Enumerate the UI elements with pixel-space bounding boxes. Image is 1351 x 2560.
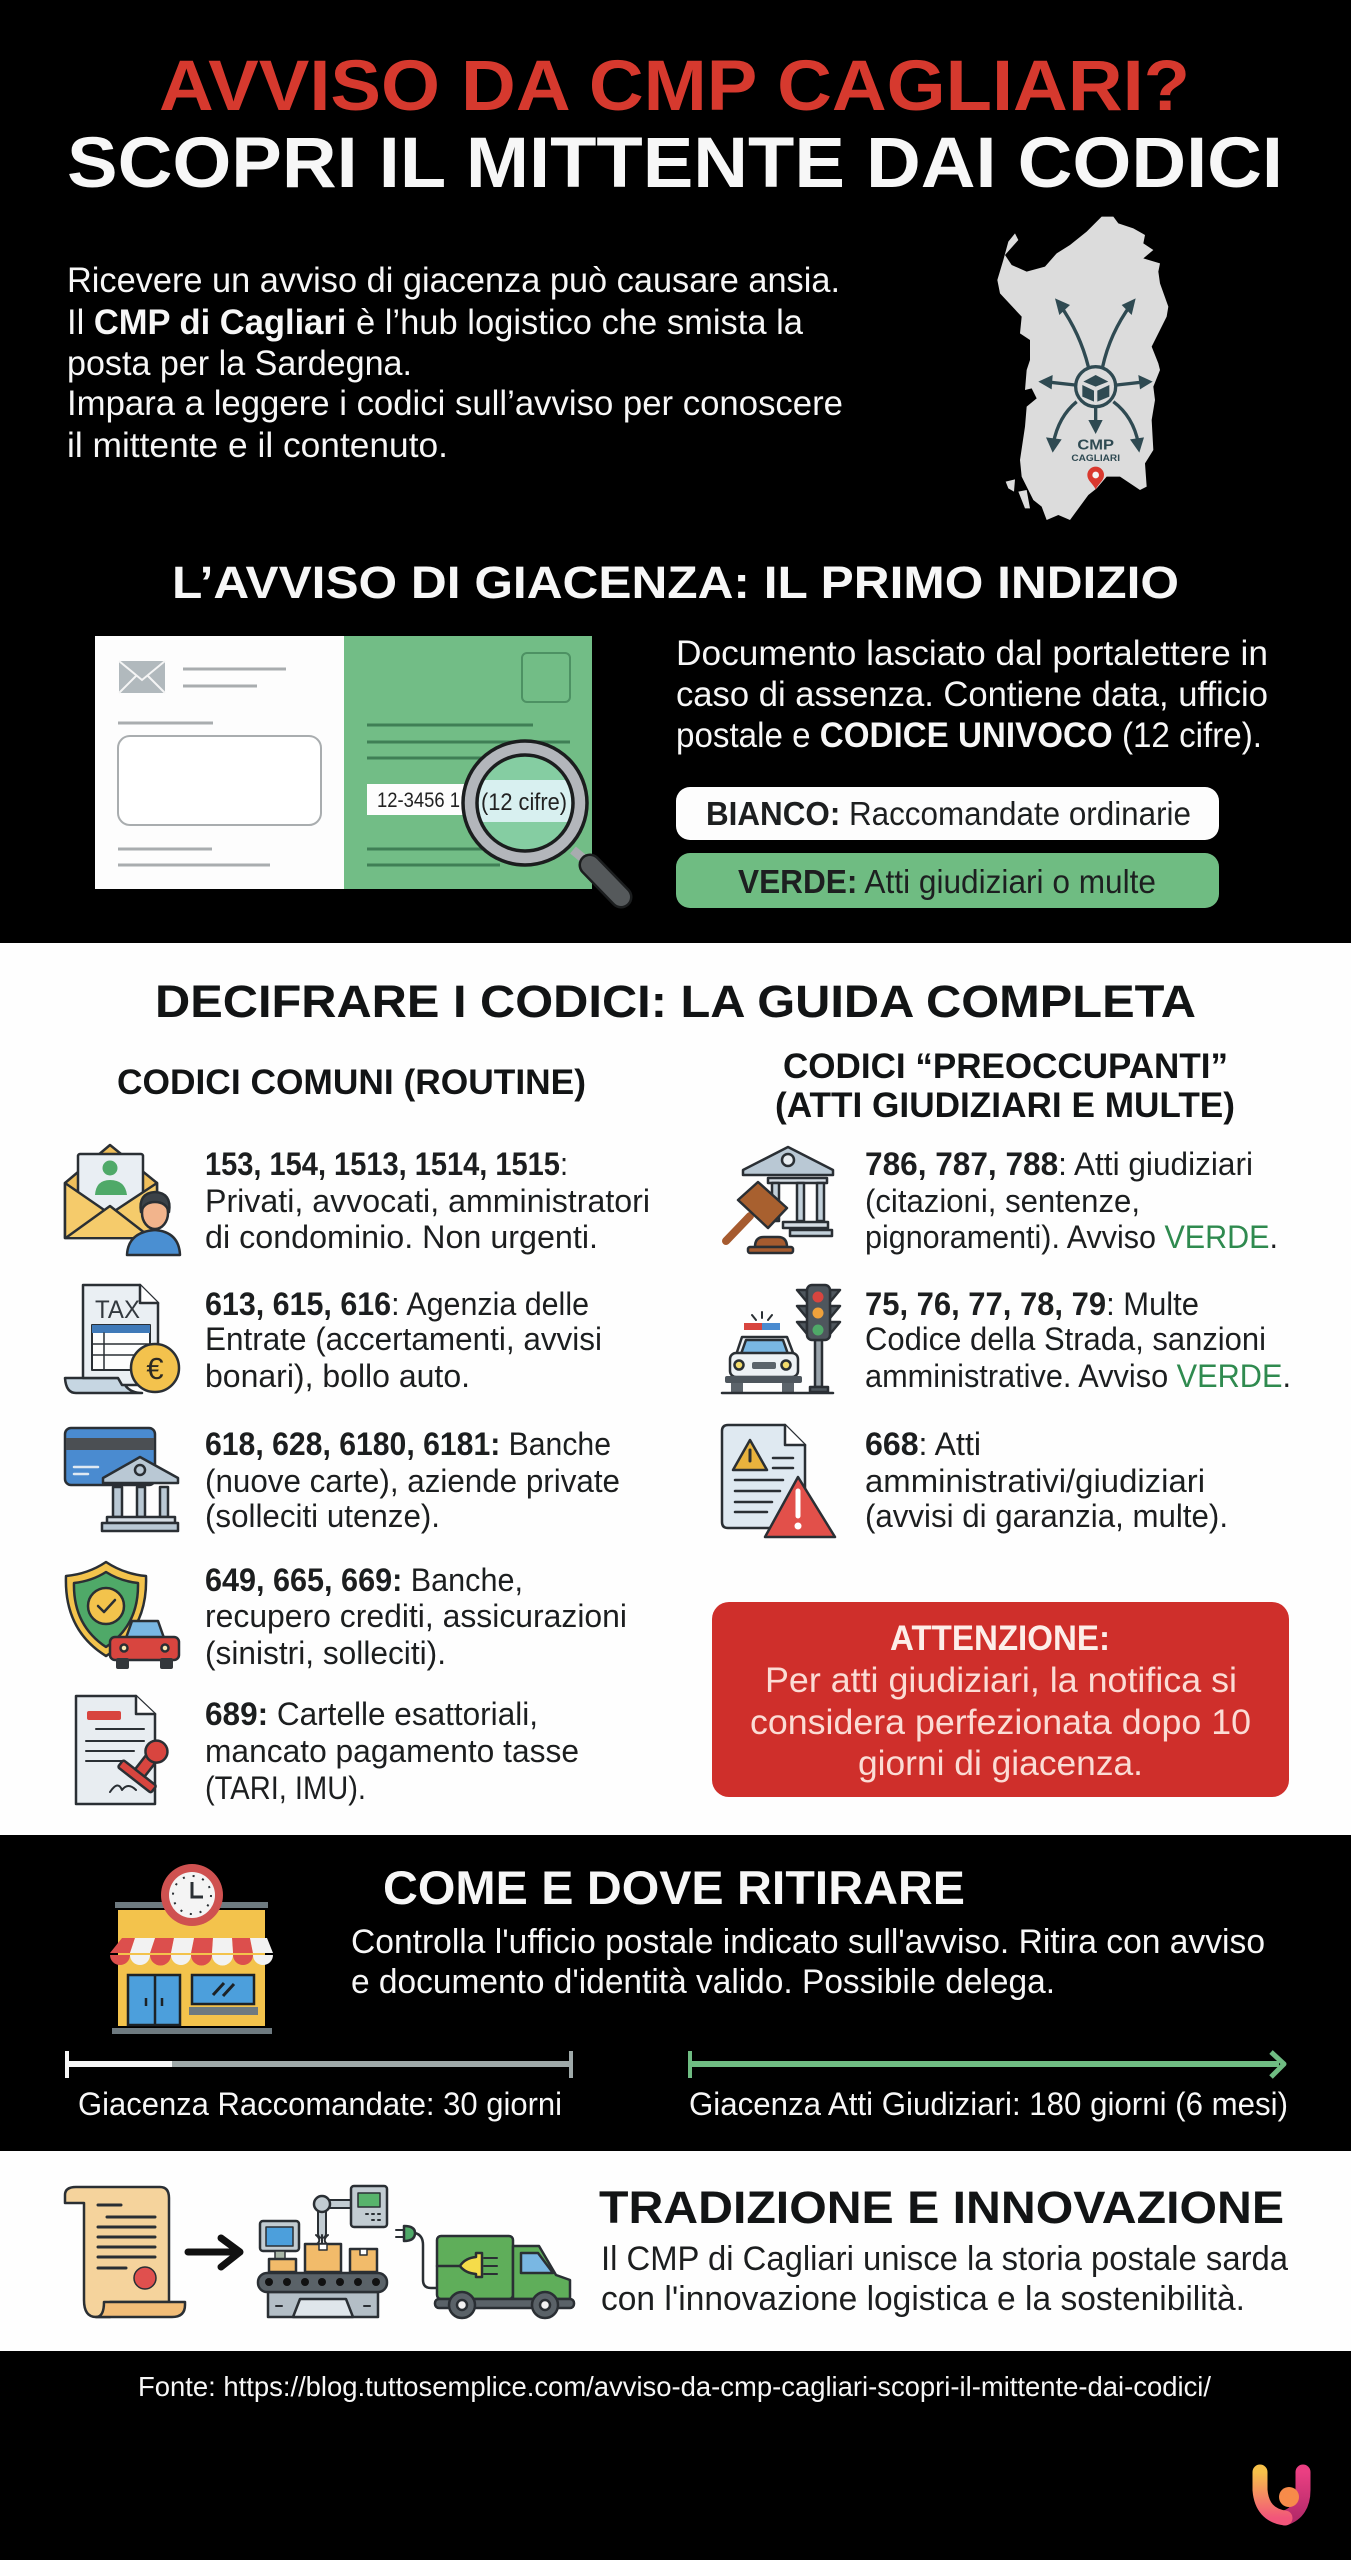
panel: header intro [0,0,1351,560]
text: codes 618: 618, 628, 6180, 6181: Banche [205,1426,611,1462]
text: codes 786: (citazioni, sentenze, [865,1183,1140,1219]
text: instructions: e documento d'identità valido. Possibile delega. [351,1963,1055,2001]
text: codes 153: di condominio. Non urgenti. [205,1219,598,1255]
description text: postale e CODICE UNIVOCO (12 cifre). [676,716,1262,755]
column heading: codici preoccupanti [775,1047,1235,1125]
text: codes 153 [205,1146,650,1255]
icon: automated sorting machine [258,2186,387,2317]
panel: tradizione e innovazione [0,2151,1351,2351]
text: codes 613: Entrate (accertamenti, avvisi [205,1321,602,1357]
text: codes 613: bonari), bollo auto. [205,1358,470,1394]
intro text [67,261,843,465]
timeline: raccomandate 30 giorni [65,2051,573,2122]
illustration: notice card with magnifier: 12-3456 1 [377,789,460,812]
illustration: notice card with magnifier: (12 cifre) [481,789,567,816]
text: instructions [351,1923,1265,2001]
icon: document with warning triangles [722,1425,835,1537]
intro text: il mittente e il contenuto. [67,426,448,465]
text: codes 613: 613, 615, 616: Agenzia delle [205,1286,589,1322]
text: codes 618 [205,1426,620,1534]
icon: tax document with euro coin [65,1285,179,1393]
text: codes 786: pignoramenti). Avviso VERDE. [865,1219,1278,1255]
text: codes 668 [865,1426,1228,1534]
panel: footer [0,2351,1351,2560]
text: codes 153: 153, 154, 1513, 1514, 1515: [205,1146,568,1182]
text: codes 689: mancato pagamento tasse [205,1733,579,1769]
column heading: codici preoccupanti: (ATTI GIUDIZIARI E MULTE) [775,1086,1235,1125]
text: codes 689: 689: Cartelle esattoriali, [205,1696,538,1732]
callout: attenzione: ATTENZIONE: [890,1619,1110,1658]
text: description: con l'innovazione logistica e la sostenibilità. [601,2280,1245,2318]
text: codes 649: 649, 665, 669: Banche, [205,1562,523,1598]
row: 689 cartelle [76,1696,579,1806]
intro text: posta per la Sardegna. [67,344,412,383]
panel: avviso di giacenza [95,566,1267,908]
row: 153 privati [65,1145,650,1255]
text: description [601,2240,1288,2318]
illustration: notice card with magnifier [95,636,621,897]
callout: attenzione: giorni di giacenza. [858,1744,1143,1783]
text: codes 668: 668: Atti [865,1426,981,1462]
timeline: atti giudiziari 180 giorni: Giacenza Atti Giudiziari: 180 giorni (6 mesi) [689,2086,1288,2122]
row: 75 multe [722,1285,1291,1394]
icon: credit card and bank [65,1428,178,1531]
text: codes 649 [205,1562,627,1671]
row: 649 assicurazioni [66,1562,627,1671]
callout: attenzione: Per atti giudiziari, la notifica si [765,1661,1237,1700]
section heading: DECIFRARE I CODICI: LA GUIDA COMPLETA [155,976,1196,1027]
timeline: atti giudiziari 180 giorni [688,2051,1288,2122]
source line: Fonte: https://blog.tuttosemplice.com/avviso-da-cmp-cagliari-scopri-il-mittente-dai-codici/ [138,2371,1211,2402]
title line 1: AVVISO DA CMP CAGLIARI? [159,47,1190,126]
panel: come e dove ritirare [0,1835,1351,2151]
row: 668 atti [722,1425,1228,1537]
icon: courthouse and gavel [726,1147,833,1253]
text: codes 75: amministrative. Avviso VERDE. [865,1358,1291,1394]
description text [676,634,1268,755]
icon: police car and traffic light [722,1285,840,1393]
description text: caso di assenza. Contiene data, ufficio [676,675,1268,714]
text: codes 689: (TARI, IMU). [205,1770,366,1806]
pill: bianco [676,787,1219,840]
timeline: raccomandate 30 giorni: Giacenza Raccomandate: 30 giorni [78,2086,562,2122]
icon: tax document with euro coin: TAX [95,1296,140,1324]
text: codes 75 [865,1286,1291,1394]
text: codes 153: Privati, avvocati, amministratori [205,1183,650,1219]
text: codes 786: 786, 787, 788: Atti giudiziari [865,1146,1253,1182]
intro text: Impara a leggere i codici sull’avviso per conoscere [67,384,843,423]
text: codes 689 [205,1696,579,1806]
section heading: TRADIZIONE E INNOVAZIONE [599,2182,1284,2233]
text: codes 75: 75, 76, 77, 78, 79: Multe [865,1286,1199,1322]
text: codes 618: (solleciti utenze). [205,1498,440,1534]
pill: verde: VERDE: Atti giudiziari o multe [738,863,1156,900]
pill: bianco: BIANCO: Raccomandate ordinarie [706,795,1191,832]
text: codes 75: Codice della Strada, sanzioni [865,1321,1266,1357]
column heading: codici preoccupanti: CODICI “PREOCCUPANTI” [783,1047,1228,1086]
icon: arrow [188,2238,240,2267]
intro text: Il CMP di Cagliari è l’hub logistico che smista la [67,303,804,342]
icon: logo [1260,2472,1303,2518]
text: codes 613 [205,1286,602,1394]
section heading: L’AVVISO DI GIACENZA: IL PRIMO INDIZIO [172,557,1179,608]
icon: map of Sardinia with CMP hub: CAGLIARI [1071,453,1120,463]
text: description: Il CMP di Cagliari unisce la storia postale sarda [601,2240,1288,2278]
icon: tax document with euro coin: € [146,1351,164,1386]
text: codes 649: recupero crediti, assicurazioni [205,1598,627,1634]
callout: attenzione [712,1602,1289,1797]
icon: post office shop with clock [110,1864,273,2034]
icon: shield with car [66,1562,179,1669]
description text: Documento lasciato dal portalettere in [676,634,1268,673]
text: instructions: Controlla l'ufficio postale indicato sull'avviso. Ritira con avviso [351,1923,1265,1961]
pill: verde [676,853,1219,908]
icon: envelope with person [65,1145,180,1255]
row: 613 agenzia entrate [65,1285,602,1394]
icon: electric delivery truck [396,2226,574,2318]
intro text: Ricevere un avviso di giacenza può causare ansia. [67,261,840,300]
text: codes 786 [865,1146,1278,1255]
section heading: COME E DOVE RITIRARE [383,1861,965,1914]
icon: map of Sardinia with CMP hub [997,217,1168,520]
panel: decifrare i codici [0,943,1351,1835]
column heading: codici comuni: CODICI COMUNI (ROUTINE) [117,1063,586,1102]
text: codes 668: (avvisi di garanzia, multe). [865,1498,1228,1534]
text: codes 649: (sinistri, solleciti). [205,1635,446,1671]
title line 2: SCOPRI IL MITTENTE DAI CODICI [67,124,1283,203]
row: 618 banche [65,1426,620,1534]
icon: map of Sardinia with CMP hub: CMP [1077,437,1114,453]
callout: attenzione: considera perfezionata dopo 10 [750,1703,1251,1742]
icon: parchment scroll [65,2187,185,2317]
row: 786 atti giudiziari [726,1146,1278,1255]
icon: document with stamp [76,1696,180,1804]
text: codes 668: amministrativi/giudiziari [865,1463,1205,1499]
text: codes 618: (nuove carte), aziende private [205,1463,620,1499]
